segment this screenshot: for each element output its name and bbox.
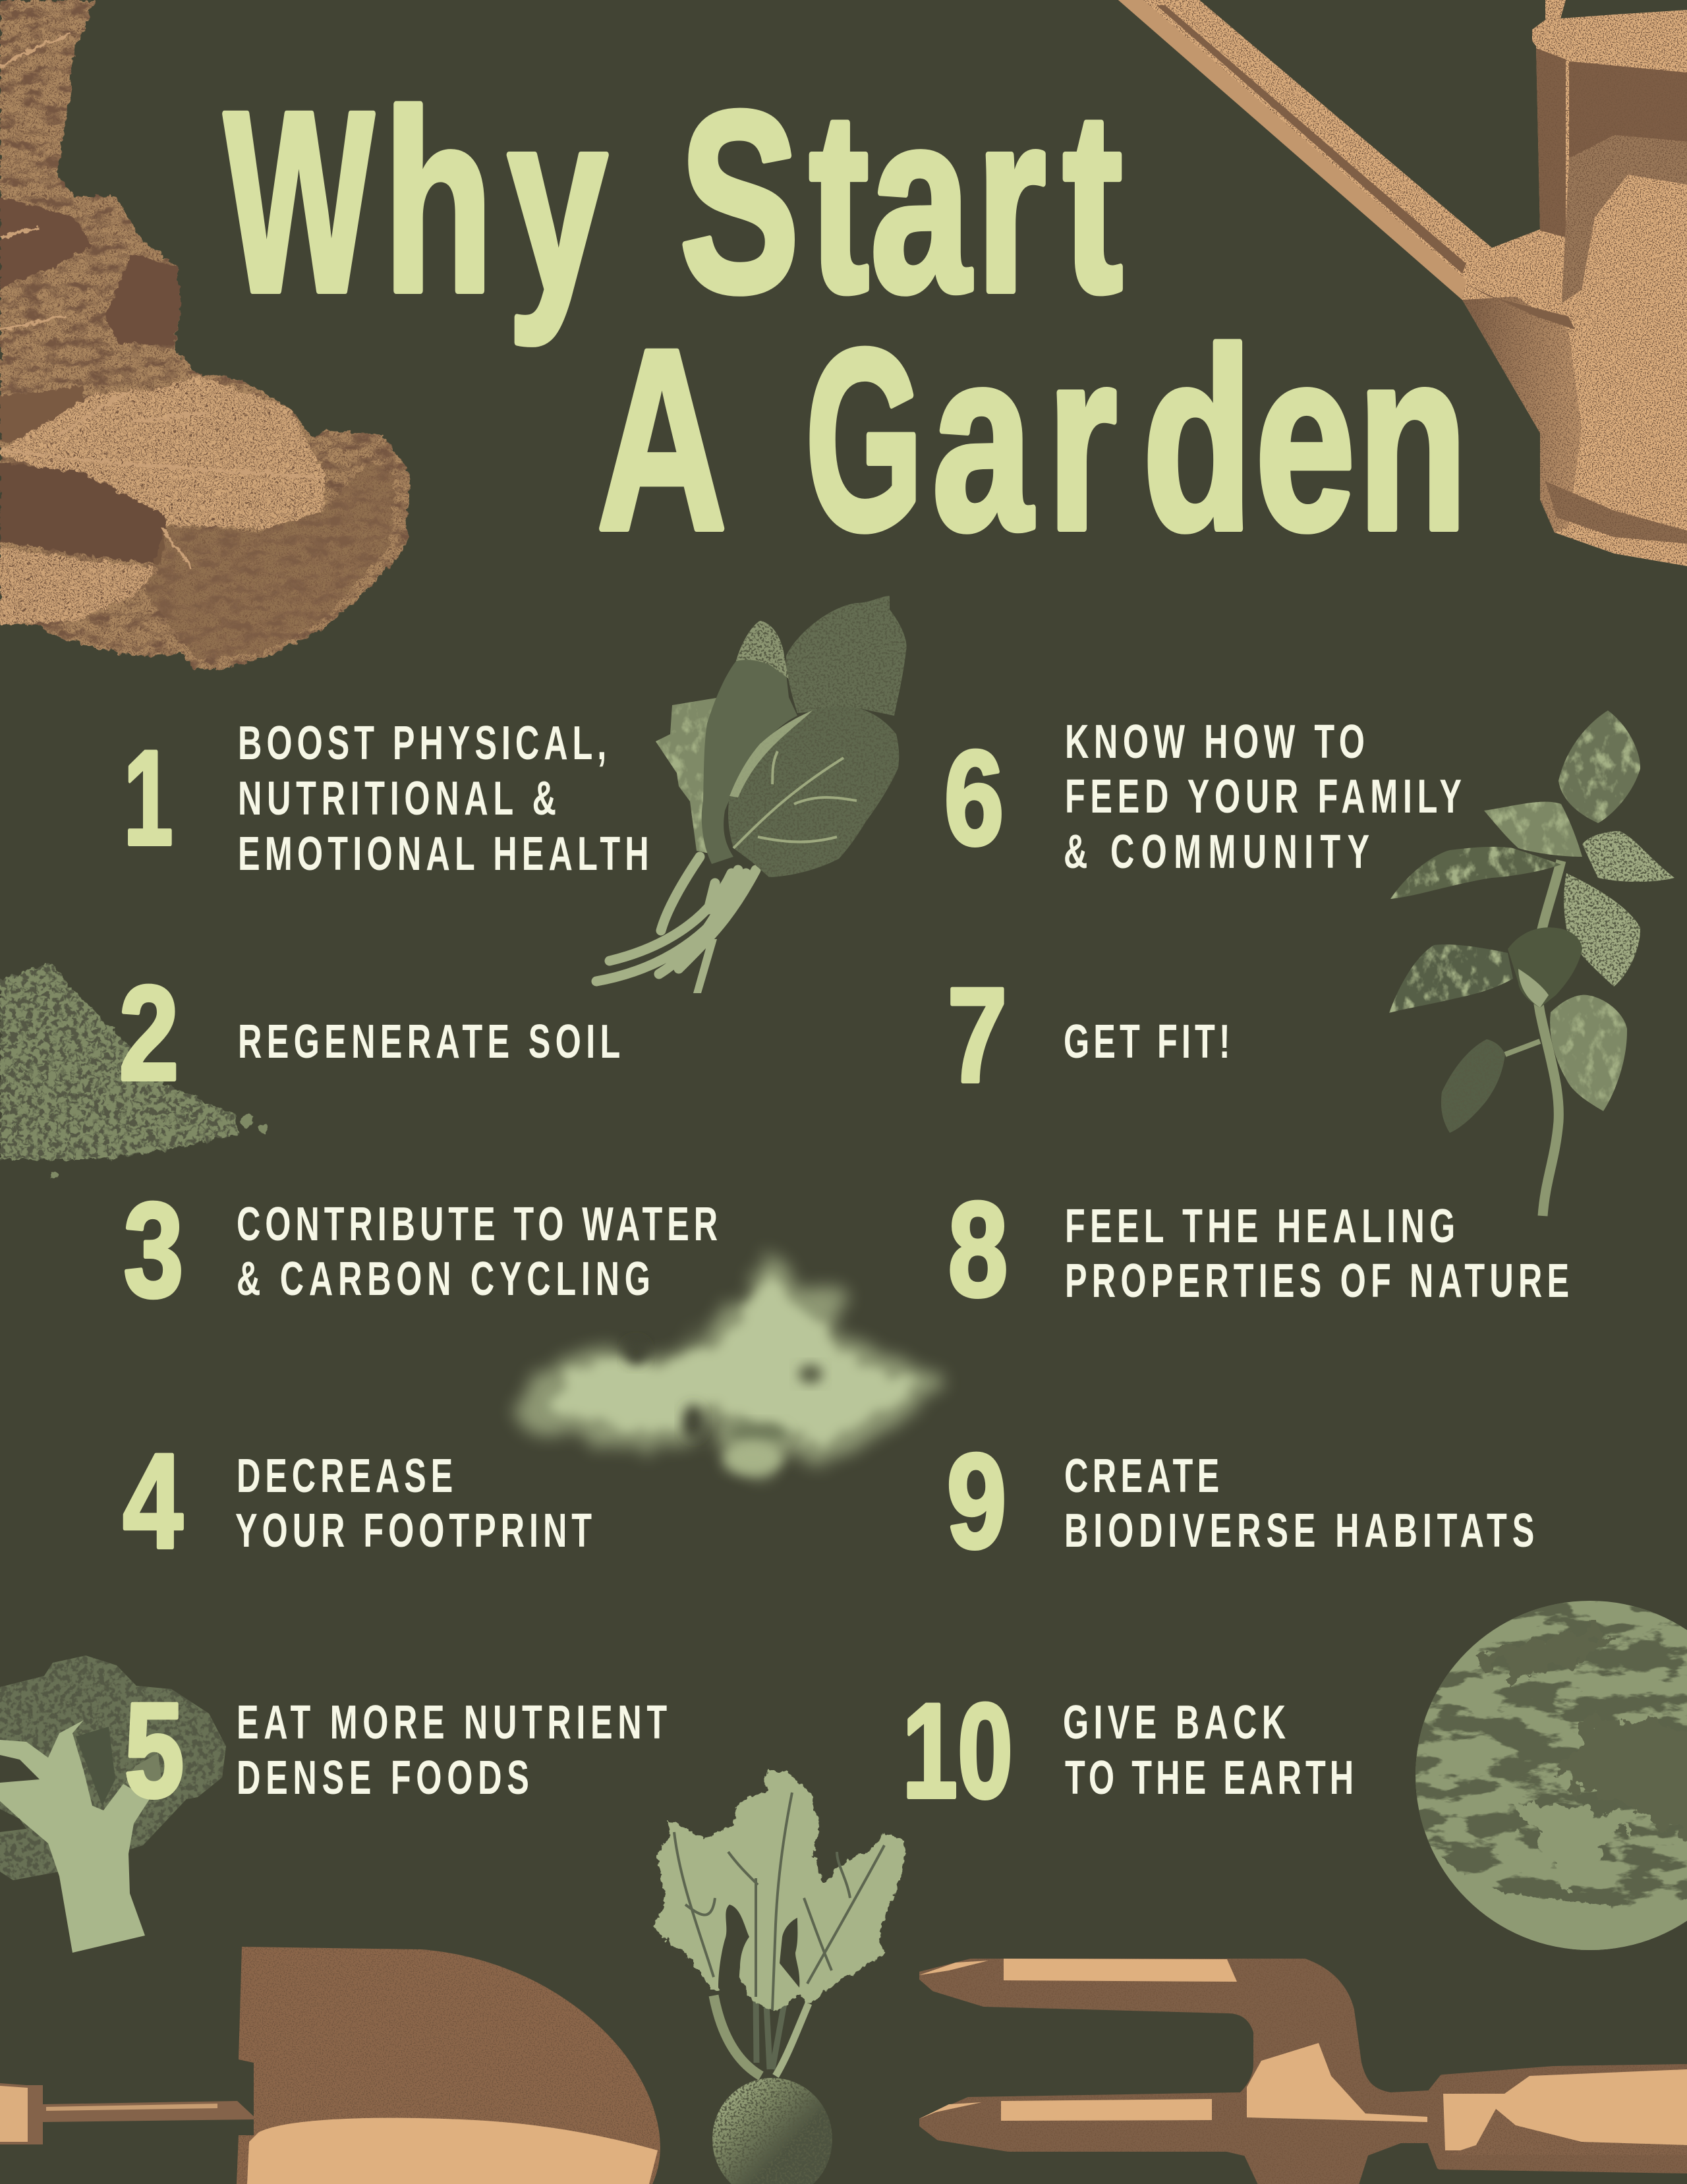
list item 3: 3: [124, 1176, 183, 1325]
list item 6: KNOW HOW TO: [1065, 716, 1365, 768]
list item 8: 8: [948, 1175, 1008, 1325]
list item 3: [124, 1176, 718, 1325]
list item 7: 7: [948, 961, 1007, 1110]
list item 6: & COMMUNITY: [1064, 826, 1369, 878]
list item 10: [902, 1677, 1354, 1826]
list item 1: [124, 717, 649, 880]
list item 1: BOOST PHYSICAL,: [238, 717, 606, 770]
list item 9: BIODIVERSE HABITATS: [1064, 1505, 1534, 1557]
list item 1: 1: [124, 723, 173, 873]
list item 4: 4: [123, 1427, 183, 1576]
list item 2: [119, 959, 620, 1108]
list item 5: 5: [125, 1676, 184, 1825]
list item 3: CONTRIBUTE TO WATER: [237, 1198, 718, 1251]
list item 10: GIVE BACK: [1063, 1696, 1286, 1749]
list item 10: TO THE EARTH: [1065, 1752, 1354, 1804]
image: globe: [1410, 1601, 1687, 1964]
list item 7: [948, 961, 1230, 1110]
list item 8: [948, 1175, 1569, 1325]
title: A: [597, 297, 727, 583]
list item 2: 2: [119, 959, 179, 1108]
list item 5: [125, 1676, 667, 1825]
list item 3: & CARBON CYCLING: [237, 1253, 650, 1306]
image: watering can: [1118, 0, 1687, 566]
list item 8: PROPERTIES OF NATURE: [1065, 1255, 1569, 1308]
image: cabbage leaf: [0, 0, 410, 669]
list item 6: FEED YOUR FAMILY: [1065, 770, 1462, 823]
title: W: [224, 58, 375, 345]
list item 6: [944, 716, 1462, 878]
list item 9: 9: [947, 1427, 1006, 1576]
list item 5: EAT MORE NUTRIENT: [237, 1696, 667, 1749]
list item 9: CREATE: [1064, 1450, 1219, 1503]
list item 8: FEEL THE HEALING: [1065, 1200, 1455, 1253]
list item 5: DENSE FOODS: [237, 1752, 529, 1804]
title: arden: [932, 297, 1468, 583]
list item 10: 10: [902, 1677, 1013, 1826]
title: hy Start: [384, 59, 1123, 347]
image: cloud: [521, 1249, 942, 1480]
image: shovel: [0, 1947, 660, 2184]
image: plant: [1389, 710, 1674, 1216]
title: G: [805, 296, 923, 583]
list item 1: EMOTIONAL HEALTH: [238, 828, 649, 880]
image: spinach: [596, 596, 907, 993]
list item 9: [947, 1427, 1534, 1576]
list item 2: REGENERATE SOIL: [238, 1016, 620, 1068]
list item 4: DECREASE: [237, 1450, 453, 1503]
image: garden fork: [919, 1959, 1687, 2184]
image: broccoli: [0, 1655, 226, 1953]
list item 4: [123, 1427, 592, 1576]
image: beet: [654, 1771, 905, 2184]
image: soil pile: [0, 962, 268, 1180]
list item 1: NUTRITIONAL &: [238, 772, 556, 825]
title: [224, 58, 1468, 583]
list item 4: YOUR FOOTPRINT: [235, 1505, 592, 1557]
list item 7: GET FIT!: [1064, 1016, 1230, 1068]
list item 6: 6: [944, 724, 1004, 873]
